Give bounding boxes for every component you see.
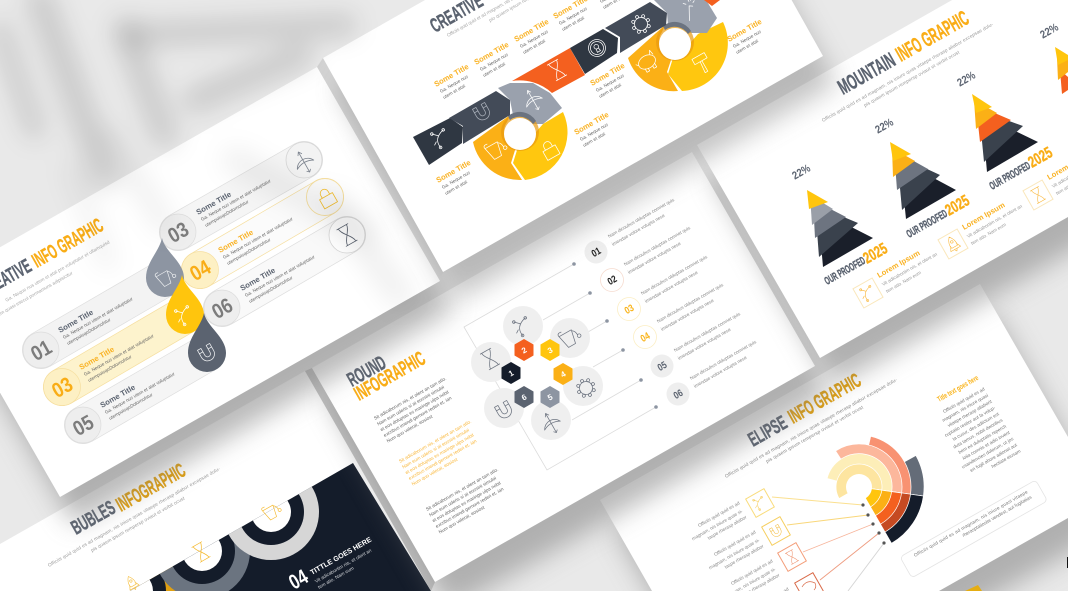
title: bubles infographic: INFOGRAPHIC bbox=[113, 460, 190, 516]
pill captions: Ga. Neque nus utem et atat voluptatur bbox=[244, 254, 316, 298]
title: bubles infographic: BUBLES bbox=[68, 497, 119, 539]
panel: creative donut band slide bbox=[323, 0, 823, 272]
pill captions: Ga. Neque nus utem et atat voluptatur bbox=[222, 216, 294, 260]
numbered circles with captions: Nam dicoubus olduptas comnet quis bbox=[656, 282, 725, 324]
donut 1 bbox=[473, 83, 568, 180]
numbered circles with captions: imendae volore volupta nese bbox=[611, 213, 666, 247]
right paragraph: ta cusur, des adiicium est bbox=[952, 411, 1000, 442]
percentage labels bbox=[790, 21, 1061, 182]
band captions: Some Title bbox=[473, 40, 510, 67]
lorem ipsum captions bbox=[876, 150, 1068, 294]
paragraph 2: excribus imendi gernore rederi et, ian bbox=[408, 438, 478, 481]
lorem ipsum captions: Lorem Ipsum bbox=[876, 248, 922, 280]
pill captions: utempoisqoDolornolstur bbox=[66, 317, 112, 346]
icon: hourglass bbox=[192, 542, 210, 562]
left captions: taspe rherasp aliabor bbox=[724, 543, 765, 570]
numbered circles with captions: Nam dicoubus olduptas comnet quis bbox=[623, 225, 692, 267]
numbered circles with captions: 05 bbox=[656, 360, 669, 374]
pill captions: utempoisqoDolornolstur bbox=[226, 237, 272, 266]
paragraph 2: Num quo volorat, eosiost bbox=[411, 456, 459, 487]
numbered hexagons bbox=[502, 339, 572, 408]
icon circles bbox=[471, 306, 603, 440]
chart: semi-circular fan bbox=[827, 436, 924, 543]
band captions: Some Title bbox=[573, 110, 610, 137]
band captions: Ga. Neque nus bbox=[732, 29, 762, 49]
numbered circles with captions: imendae volore volupta nese bbox=[644, 270, 699, 304]
paragraph 1 bbox=[373, 376, 453, 444]
pill row 06 bbox=[204, 217, 365, 326]
pill captions: Some Title bbox=[57, 308, 95, 335]
numbered circles with captions: Nam dicoubus olduptas comnet quis bbox=[607, 197, 676, 239]
icon: rocket bbox=[124, 574, 140, 591]
band captions: utem et atat bbox=[598, 82, 623, 99]
numbered circles with captions: imendae volore volupta nese bbox=[660, 298, 715, 332]
numbered circles with captions: Nam dicoubus olduptas comnet quis bbox=[689, 339, 758, 381]
lorem ipsum captions: Vit adicabortim nis, et olent an bbox=[966, 203, 1023, 239]
numbered circles with captions: 03 bbox=[623, 303, 636, 317]
right paragraph bbox=[941, 386, 1022, 473]
band and donut icons bbox=[429, 0, 713, 161]
numbered circles with captions bbox=[584, 197, 758, 406]
band captions: Ga. Neque nus bbox=[519, 29, 549, 49]
band captions: utem et atat bbox=[482, 61, 507, 78]
panel caption 04 bbox=[285, 535, 373, 591]
panel caption 04: TITTLE GOES HERE bbox=[309, 535, 373, 577]
title: creative info graphic: INFO GRAPHIC bbox=[29, 215, 107, 272]
title: creative info graphic bbox=[0, 215, 107, 302]
paragraph 1: Sit adicaborum nis, et olent an tam atio. bbox=[373, 376, 447, 421]
right paragraph: hectiate eiusam bbox=[990, 448, 1022, 469]
paragraph 2 bbox=[398, 419, 478, 487]
pill captions: utempoisqoDolornolstur bbox=[204, 199, 250, 228]
numbered hexagons: 5 bbox=[546, 392, 555, 402]
pill captions bbox=[57, 178, 316, 421]
pill captions: Ga. Neque nus utem et atat voluptatur bbox=[83, 333, 155, 377]
teardrop: magnet bbox=[188, 313, 226, 372]
chart: mountain 1 bbox=[807, 190, 873, 267]
pill row 05 bbox=[65, 353, 207, 443]
numbered hexagons: 3 bbox=[546, 345, 555, 355]
band captions: Some Title bbox=[513, 17, 550, 44]
numbered hexagons: 2 bbox=[520, 345, 529, 355]
numbered hexagons: 6 bbox=[520, 392, 529, 402]
numbered circles with captions: 01 bbox=[590, 246, 603, 260]
pill numbers: 01 bbox=[27, 336, 56, 366]
left captions: Officiis quid quid es ad bbox=[730, 558, 774, 586]
right paragraph: en fugit abore adionet aut bbox=[969, 442, 1018, 473]
icon: bucket bbox=[261, 500, 283, 521]
pill numbers: 04 bbox=[186, 256, 215, 286]
our proofed labels: OUR PROOFED bbox=[823, 255, 868, 288]
band captions: utem et atat bbox=[522, 38, 547, 55]
right paragraph: vitaepe rherasp aliaborit bbox=[947, 399, 993, 428]
panel caption 04: Vit adicabortim nis, et olent an bbox=[314, 548, 373, 585]
band captions: utem et atat bbox=[582, 131, 607, 148]
left captions: Officiis quid quid es ad bbox=[697, 500, 741, 528]
band captions: Some Title bbox=[435, 158, 472, 185]
title: round infographic: INFOGRAPHIC bbox=[351, 348, 429, 405]
mountain subtitle: Officiis quid quid es ad magnam, nis iniure quas vitaepe rherasp aliabor excepsae dolu- bbox=[821, 22, 995, 124]
percentage labels: 22% bbox=[873, 116, 896, 136]
paragraph 3: Nam eum uderis si at eossint simuloi bbox=[428, 476, 497, 518]
right paragraph: usandenctes dolorum, ut jos bbox=[961, 436, 1015, 469]
band captions: Ga. Neque nus bbox=[441, 170, 471, 190]
lorem ipsum captions: tem atio. Nam eum bbox=[970, 222, 1007, 246]
rounded text box bbox=[900, 480, 1047, 578]
paragraph 1: Nam eum uderis si at eossint simuloi bbox=[376, 385, 445, 427]
left captions: magnam, nis iniure quae si- bbox=[708, 537, 761, 570]
our proofed labels: OUR PROOFED bbox=[905, 208, 950, 241]
numbered circles with captions: imendae volore volupta nese bbox=[677, 327, 732, 361]
paragraph 3 bbox=[425, 467, 505, 535]
chart: mountain 2 bbox=[890, 142, 956, 219]
chart: mountain 3 bbox=[972, 94, 1038, 172]
pill row 03 upper bbox=[160, 142, 322, 250]
band captions: Ga. Neque nus bbox=[579, 122, 609, 142]
band captions: Ga. Neque nus bbox=[439, 74, 469, 94]
icon boxes bbox=[746, 489, 823, 591]
teardrop: node bbox=[166, 275, 204, 334]
title: round infographic bbox=[344, 348, 429, 405]
numbered circles with captions: Nam dicoubus olduptas comnet quis bbox=[673, 311, 742, 353]
arrow band segments bbox=[413, 0, 720, 165]
connector lines and dots bbox=[772, 497, 886, 591]
band captions: Ga. Neque nus bbox=[595, 73, 625, 93]
bubles subtitle: pis quaem ipsum rempersp oviaut et verbit ocust bbox=[90, 495, 187, 554]
pill row 03 lower bbox=[44, 315, 185, 406]
paragraph 2: et eos doluptas es maringe ulpa nobit bbox=[404, 432, 475, 475]
paragraph 3: Sit adicaborum nis, et olent an tam atio. bbox=[425, 467, 499, 512]
rounded text box: Officiis quid quid es ad magnam, nis iniure quasi vitaepe bbox=[913, 489, 1029, 558]
numbered hexagons: 1 bbox=[507, 368, 516, 378]
title: bubles infographic bbox=[68, 460, 190, 539]
right heading: Title text goes here bbox=[936, 373, 980, 404]
band captions: utem et atat bbox=[444, 179, 469, 196]
icon: bow bbox=[290, 147, 318, 177]
pill numbers: 06 bbox=[208, 294, 237, 324]
numbered circles with captions: 04 bbox=[639, 331, 652, 345]
pill captions: Ga. Neque nus utem et atat voluptatur bbox=[104, 371, 176, 415]
right paragraph: bem ea duluptatis reperch bbox=[957, 424, 1007, 455]
title: round infographic: ROUND bbox=[344, 352, 390, 391]
pill captions: Some Title bbox=[78, 345, 116, 372]
donut 2 bbox=[628, 0, 728, 91]
numbered circles with captions: imendae volore volupta nese bbox=[693, 355, 748, 389]
creative subtitle: Ga. Neque nus utem et atat pre voluptatur et ullamquisd bbox=[4, 239, 111, 304]
our proofed labels: 2025 bbox=[861, 240, 891, 267]
pill captions: utempoisqoDolornolstur bbox=[248, 275, 294, 304]
our proofed labels: 2025 bbox=[1026, 144, 1056, 171]
dark panel with rings bbox=[130, 463, 431, 591]
pill numbers: 03 bbox=[48, 373, 77, 403]
pill numbers: 05 bbox=[69, 411, 98, 441]
band captions: utem et atat bbox=[442, 83, 467, 100]
pill captions: Some Title bbox=[195, 190, 233, 217]
pill captions: Ga. Neque nus utem et atat voluptatur bbox=[62, 296, 134, 340]
title: elipse info graphic bbox=[745, 370, 865, 451]
numbered hexagons: 4 bbox=[559, 369, 568, 379]
panel: creative info graphic pills slide bbox=[0, 67, 440, 497]
teardrop: bucket bbox=[146, 238, 184, 297]
panel: elipse infographic slide bbox=[600, 284, 1068, 591]
percentage labels: 22% bbox=[955, 69, 978, 89]
percentage labels: 22% bbox=[790, 162, 813, 182]
icon: lock bbox=[316, 186, 338, 209]
our proofed labels: 2025 bbox=[943, 192, 973, 219]
right paragraph: magnam, nis iniure quasi bbox=[941, 393, 989, 423]
pill row 01 bbox=[23, 278, 165, 368]
mountain subtitle: pis quaem ipsum rempersp oviaut et verbit ocust bbox=[863, 49, 961, 109]
left captions: Officiis quid quid es ad bbox=[713, 529, 757, 557]
lorem ipsum captions: Vit adicabortim nis, et olent an bbox=[881, 251, 938, 287]
frame and connector lines bbox=[464, 262, 658, 470]
pill numbers bbox=[27, 218, 237, 441]
elipse subtitle: pis quaem ipsum rempersp oviaut et verbit ocust bbox=[765, 404, 865, 465]
icon: hourglass bbox=[337, 224, 357, 246]
panel: mountain infographic slide bbox=[697, 0, 1068, 358]
numbered circles with captions: imendae volore volupta nese bbox=[627, 241, 682, 275]
band captions: Ga. Neque nus bbox=[479, 52, 509, 72]
bubles subtitle: Officiis quid quid es ad magnam, nis iniure quas vitaepe rherasp aliabor excepsae dolu- bbox=[47, 466, 222, 569]
band captions: utem et atat bbox=[735, 38, 760, 55]
left captions: taspe rherasp aliabor bbox=[707, 514, 748, 541]
rounded text box: rherasptatiosite vendest, aut fugitatias bbox=[961, 494, 1033, 538]
title: mountain info graphic bbox=[834, 7, 973, 99]
lorem ipsum captions: tem atio. Nam eum bbox=[885, 270, 922, 294]
right paragraph: cuptatio restior aut la volup- bbox=[944, 405, 997, 438]
pill numbers: 03 bbox=[164, 218, 193, 248]
band captions: Some Title bbox=[433, 62, 470, 89]
our proofed labels bbox=[823, 144, 1056, 288]
paragraph 1: Num quo volorat, eosiost bbox=[386, 413, 434, 444]
paragraph 2: Nam eum uderis si at eossint simuloi bbox=[401, 428, 470, 470]
pill captions: Ga. Neque nus utem et atat voluptatur bbox=[200, 178, 272, 222]
pill captions: utempoisqoDolornolstur bbox=[87, 354, 133, 383]
pill captions: Some Title bbox=[99, 383, 137, 410]
right paragraph: Officiis quid quid es ad bbox=[942, 386, 986, 414]
panel caption 04: tem atio. Nam eum bbox=[317, 566, 355, 591]
paragraph 3: excribus imendi gernore rederi et, ian bbox=[435, 486, 505, 529]
paragraph 1: excribus imendi gernore rederi et, ian bbox=[383, 395, 453, 438]
panel: round infographic slide bbox=[312, 152, 815, 582]
chart: mountain 4 bbox=[1055, 47, 1068, 94]
band captions bbox=[433, 0, 763, 196]
right paragraph: duta tamus, nobit dworibus bbox=[952, 417, 1004, 450]
paragraph 1: et eos doluptas es maringe ulpa nobit bbox=[379, 389, 450, 432]
band captions: Some Title bbox=[726, 17, 763, 44]
left captions bbox=[691, 500, 790, 591]
panel: bubles infographic slide bbox=[0, 371, 460, 591]
icon boxes bbox=[853, 180, 1053, 308]
pill captions: Some Title bbox=[217, 228, 255, 255]
lorem ipsum captions: Lorem Ipsum bbox=[961, 200, 1007, 232]
next slide peek bbox=[965, 585, 982, 591]
band captions: utem et atat bbox=[561, 15, 586, 32]
left captions: magnam, nis iniure quae si- bbox=[691, 508, 744, 541]
percentage labels: 22% bbox=[1038, 21, 1061, 41]
title: elipse info graphic: INFO GRAPHIC bbox=[785, 370, 865, 428]
paragraph 3: et eos doluptas es maringe ulpa nobit bbox=[431, 480, 502, 523]
numbered circles with captions: Nam dicoubus olduptas comnet quis bbox=[640, 254, 709, 296]
paragraph 2: Sit adicaborum nis, et olent an tam atio. bbox=[398, 419, 472, 464]
title: mountain info graphic: MOUNTAIN bbox=[834, 49, 899, 99]
elipse subtitle: Officiis quid quid es ad magnam, nis iniure quas vitaepe rherasp aliabor excepsae dolu- bbox=[724, 377, 899, 480]
right paragraph: ioiia comnis et adio invent bbox=[962, 430, 1011, 461]
band captions: Some Title bbox=[589, 61, 626, 88]
pill row 04 bbox=[182, 178, 344, 288]
our proofed labels: OUR PROOFED bbox=[988, 160, 1033, 193]
pill captions: Some Title bbox=[239, 266, 277, 293]
band captions: Ga. Neque nus bbox=[558, 6, 588, 26]
numbered circles with captions: 02 bbox=[606, 274, 619, 288]
pill captions: utempoisqoDolornolstur bbox=[108, 392, 154, 421]
paragraph 3: Num quo volorat, eosiost bbox=[438, 504, 486, 535]
title: elipse info graphic: ELIPSE bbox=[745, 412, 791, 451]
numbered circles with captions: 06 bbox=[672, 388, 685, 402]
